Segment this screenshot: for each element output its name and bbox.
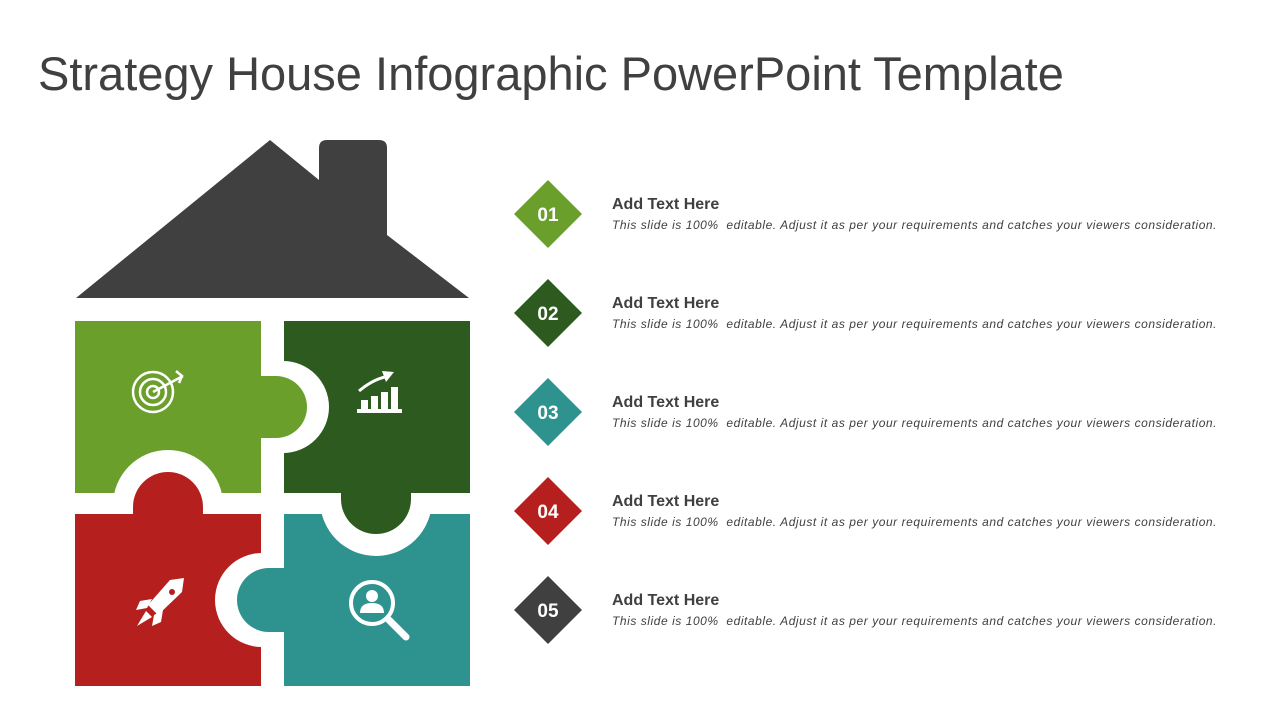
text 05 — [612, 592, 1217, 628]
text 04: This slide is 100% editable. Adjust it as per your requirements and catches your viewers consideration. — [612, 515, 1217, 529]
text 03: Add Text Here — [612, 394, 719, 411]
diamond 04: 04 — [537, 502, 559, 523]
diamonds — [514, 180, 582, 644]
diamond 04 — [514, 477, 582, 545]
roof — [76, 140, 469, 298]
text 05: This slide is 100% editable. Adjust it as per your requirements and catches your viewers consideration. — [612, 614, 1217, 628]
text 05: Add Text Here — [612, 592, 719, 609]
diamond 02: 02 — [537, 304, 559, 325]
text 03 — [612, 394, 1217, 430]
diamond 05: 05 — [537, 601, 559, 622]
diamond 01: 01 — [537, 205, 559, 226]
puzzle — [75, 321, 470, 686]
text 02: This slide is 100% editable. Adjust it as per your requirements and catches your viewers consideration. — [612, 317, 1217, 331]
text 02: Add Text Here — [612, 295, 719, 312]
text 01: Add Text Here — [612, 196, 719, 213]
text 01 — [612, 196, 1217, 232]
diamond 02 — [514, 279, 582, 347]
diamond 05 — [514, 576, 582, 644]
text 04: Add Text Here — [612, 493, 719, 510]
icon: target — [133, 371, 183, 412]
diamond 03 — [514, 378, 582, 446]
text 01: This slide is 100% editable. Adjust it as per your requirements and catches your viewers consideration. — [612, 218, 1217, 232]
text 04 — [612, 493, 1217, 529]
text 02 — [612, 295, 1217, 331]
icon: search user — [351, 582, 406, 637]
text 03: This slide is 100% editable. Adjust it as per your requirements and catches your viewers consideration. — [612, 416, 1217, 430]
icon: chart — [357, 371, 402, 413]
diamond 01 — [514, 180, 582, 248]
title: Strategy House Infographic PowerPoint Template — [38, 47, 1064, 100]
icon: rocket — [136, 578, 184, 626]
house graphic — [75, 140, 470, 686]
diamond 03: 03 — [537, 403, 559, 424]
